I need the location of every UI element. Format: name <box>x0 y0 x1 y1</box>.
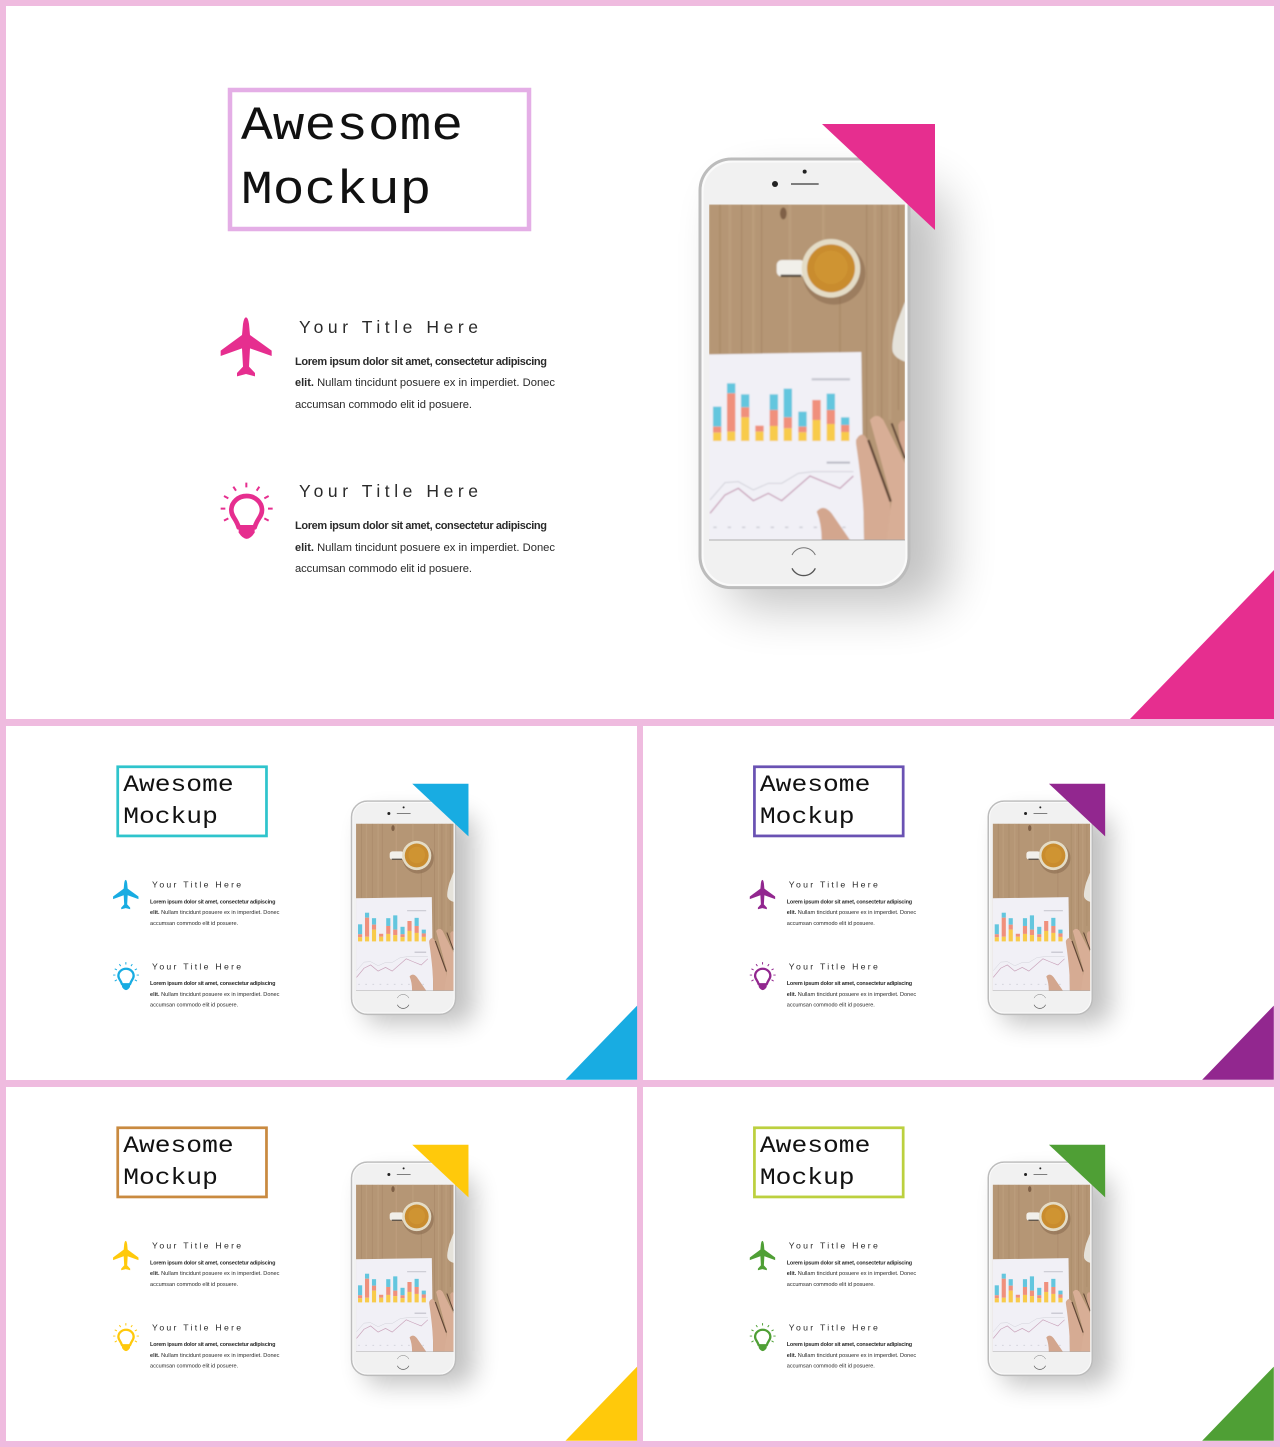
icon: light bulb <box>113 1323 139 1351</box>
corner triangle <box>565 1367 637 1441</box>
text block: second item: Your Title Here <box>152 961 241 971</box>
text block: first item: Lorem ipsum dolor sit amet, consectetur adipiscing <box>787 1261 912 1267</box>
slide content <box>113 767 637 1080</box>
title box <box>118 1128 266 1197</box>
text block: second item: Lorem ipsum dolor sit amet, consectetur adipiscing <box>150 1342 275 1348</box>
text block: second item: Your Title Here <box>789 1322 878 1332</box>
panel: purple slide <box>643 726 1274 1080</box>
title box: Awesome <box>760 1133 870 1160</box>
text block: first item: Your Title Here <box>299 317 478 337</box>
text block: second item: accumsan commodo elit id posuere. <box>150 1364 239 1370</box>
title box: Awesome <box>123 1133 234 1160</box>
text block: first item: accumsan commodo elit id posuere. <box>150 921 239 927</box>
text block: first item <box>787 880 916 927</box>
title box: Mockup <box>760 1165 855 1192</box>
text block: second item <box>150 961 280 1009</box>
text block: first item: Your Title Here <box>789 1241 878 1251</box>
text block: first item: Lorem ipsum dolor sit amet, consectetur adipiscing <box>787 900 912 906</box>
title box: Mockup <box>123 1165 218 1192</box>
text block: second item <box>787 1322 916 1370</box>
text block: second item: elit. Nullam tincidunt posuere ex in imperdiet. Donec <box>295 542 555 554</box>
corner triangle <box>1202 1006 1274 1080</box>
text block: second item: Lorem ipsum dolor sit amet, consectetur adipiscing <box>295 520 547 532</box>
corner triangle <box>1202 1367 1274 1441</box>
text block: second item: Lorem ipsum dolor sit amet, consectetur adipiscing <box>787 981 912 987</box>
phone mockup <box>352 801 474 1024</box>
panel: large pink slide <box>6 6 1274 719</box>
slide content <box>750 767 1274 1080</box>
corner triangle <box>1130 570 1274 719</box>
phone corner triangle <box>1049 1145 1105 1197</box>
text block: second item: accumsan commodo elit id posuere. <box>150 1003 239 1009</box>
phone corner triangle <box>822 124 935 230</box>
text block: first item: elit. Nullam tincidunt posuere ex in imperdiet. Donec <box>787 1271 916 1277</box>
text block: second item: elit. Nullam tincidunt posuere ex in imperdiet. Donec <box>787 992 916 998</box>
text block: first item: elit. Nullam tincidunt posuere ex in imperdiet. Donec <box>787 910 916 916</box>
text block: second item: Lorem ipsum dolor sit amet, consectetur adipiscing <box>150 981 275 987</box>
text block: second item: Your Title Here <box>789 961 878 971</box>
title box <box>230 90 529 229</box>
text block: first item: elit. Nullam tincidunt posuere ex in imperdiet. Donec <box>295 377 555 389</box>
title box: Mockup <box>760 804 855 831</box>
text block: second item: elit. Nullam tincidunt posuere ex in imperdiet. Donec <box>787 1353 916 1359</box>
text block: first item: accumsan commodo elit id posuere. <box>150 1282 239 1288</box>
icon: airplane <box>113 1241 138 1270</box>
title box: Mockup <box>123 804 218 831</box>
phone corner triangle <box>1049 784 1105 836</box>
title box <box>754 767 903 836</box>
text block: first item: accumsan commodo elit id posuere. <box>787 1282 875 1288</box>
icon: airplane <box>750 880 775 909</box>
phone corner triangle <box>412 784 468 836</box>
corner triangle <box>565 1006 637 1080</box>
text block: second item: elit. Nullam tincidunt posuere ex in imperdiet. Donec <box>150 1353 280 1359</box>
text block: second item: Your Title Here <box>152 1322 241 1332</box>
panel: blue slide <box>6 726 637 1080</box>
text block: first item: Lorem ipsum dolor sit amet, consectetur adipiscing <box>150 1261 275 1267</box>
title box <box>118 767 266 836</box>
panel: green slide <box>643 1087 1274 1441</box>
phone corner triangle <box>412 1145 468 1197</box>
panel: yellow slide <box>6 1087 637 1441</box>
text block: second item: accumsan commodo elit id posuere. <box>295 563 472 575</box>
phone mockup <box>352 1162 474 1385</box>
text block: first item: Lorem ipsum dolor sit amet, consectetur adipiscing <box>295 356 547 368</box>
title box: Awesome <box>241 100 463 154</box>
text block: first item: Your Title Here <box>789 880 878 890</box>
phone mockup <box>700 159 947 607</box>
text block: first item <box>295 317 555 411</box>
text block: first item: accumsan commodo elit id posuere. <box>787 921 875 927</box>
icon: light bulb <box>113 962 139 990</box>
text block: second item <box>295 481 555 575</box>
text block: first item <box>150 1241 280 1288</box>
slide content <box>750 1128 1274 1441</box>
title box <box>754 1128 903 1197</box>
text block: second item: Lorem ipsum dolor sit amet, consectetur adipiscing <box>787 1342 912 1348</box>
icon: airplane <box>221 317 272 376</box>
text block: second item: accumsan commodo elit id posuere. <box>787 1364 875 1370</box>
text block: first item: Lorem ipsum dolor sit amet, consectetur adipiscing <box>150 900 275 906</box>
title box: Mockup <box>241 164 431 218</box>
text block: second item: Your Title Here <box>299 481 478 501</box>
text block: second item <box>787 961 916 1009</box>
text block: first item <box>150 880 280 927</box>
text block: first item: elit. Nullam tincidunt posuere ex in imperdiet. Donec <box>150 1271 280 1277</box>
text block: second item: accumsan commodo elit id posuere. <box>787 1003 875 1009</box>
icon: light bulb <box>221 483 273 539</box>
icon: airplane <box>113 880 138 909</box>
icon: light bulb <box>750 962 776 990</box>
phone mockup <box>988 801 1111 1024</box>
phone mockup <box>988 1162 1111 1385</box>
text block: first item: elit. Nullam tincidunt posuere ex in imperdiet. Donec <box>150 910 280 916</box>
slide content <box>113 1128 637 1441</box>
icon: light bulb <box>750 1323 776 1351</box>
text block: second item <box>150 1322 280 1370</box>
text block: first item: Your Title Here <box>152 880 241 890</box>
title box: Awesome <box>760 772 870 799</box>
title box: Awesome <box>123 772 234 799</box>
icon: airplane <box>750 1241 775 1270</box>
text block: second item: elit. Nullam tincidunt posuere ex in imperdiet. Donec <box>150 992 280 998</box>
text block: first item: Your Title Here <box>152 1241 241 1251</box>
text block: first item <box>787 1241 916 1288</box>
text block: first item: accumsan commodo elit id posuere. <box>295 399 472 411</box>
